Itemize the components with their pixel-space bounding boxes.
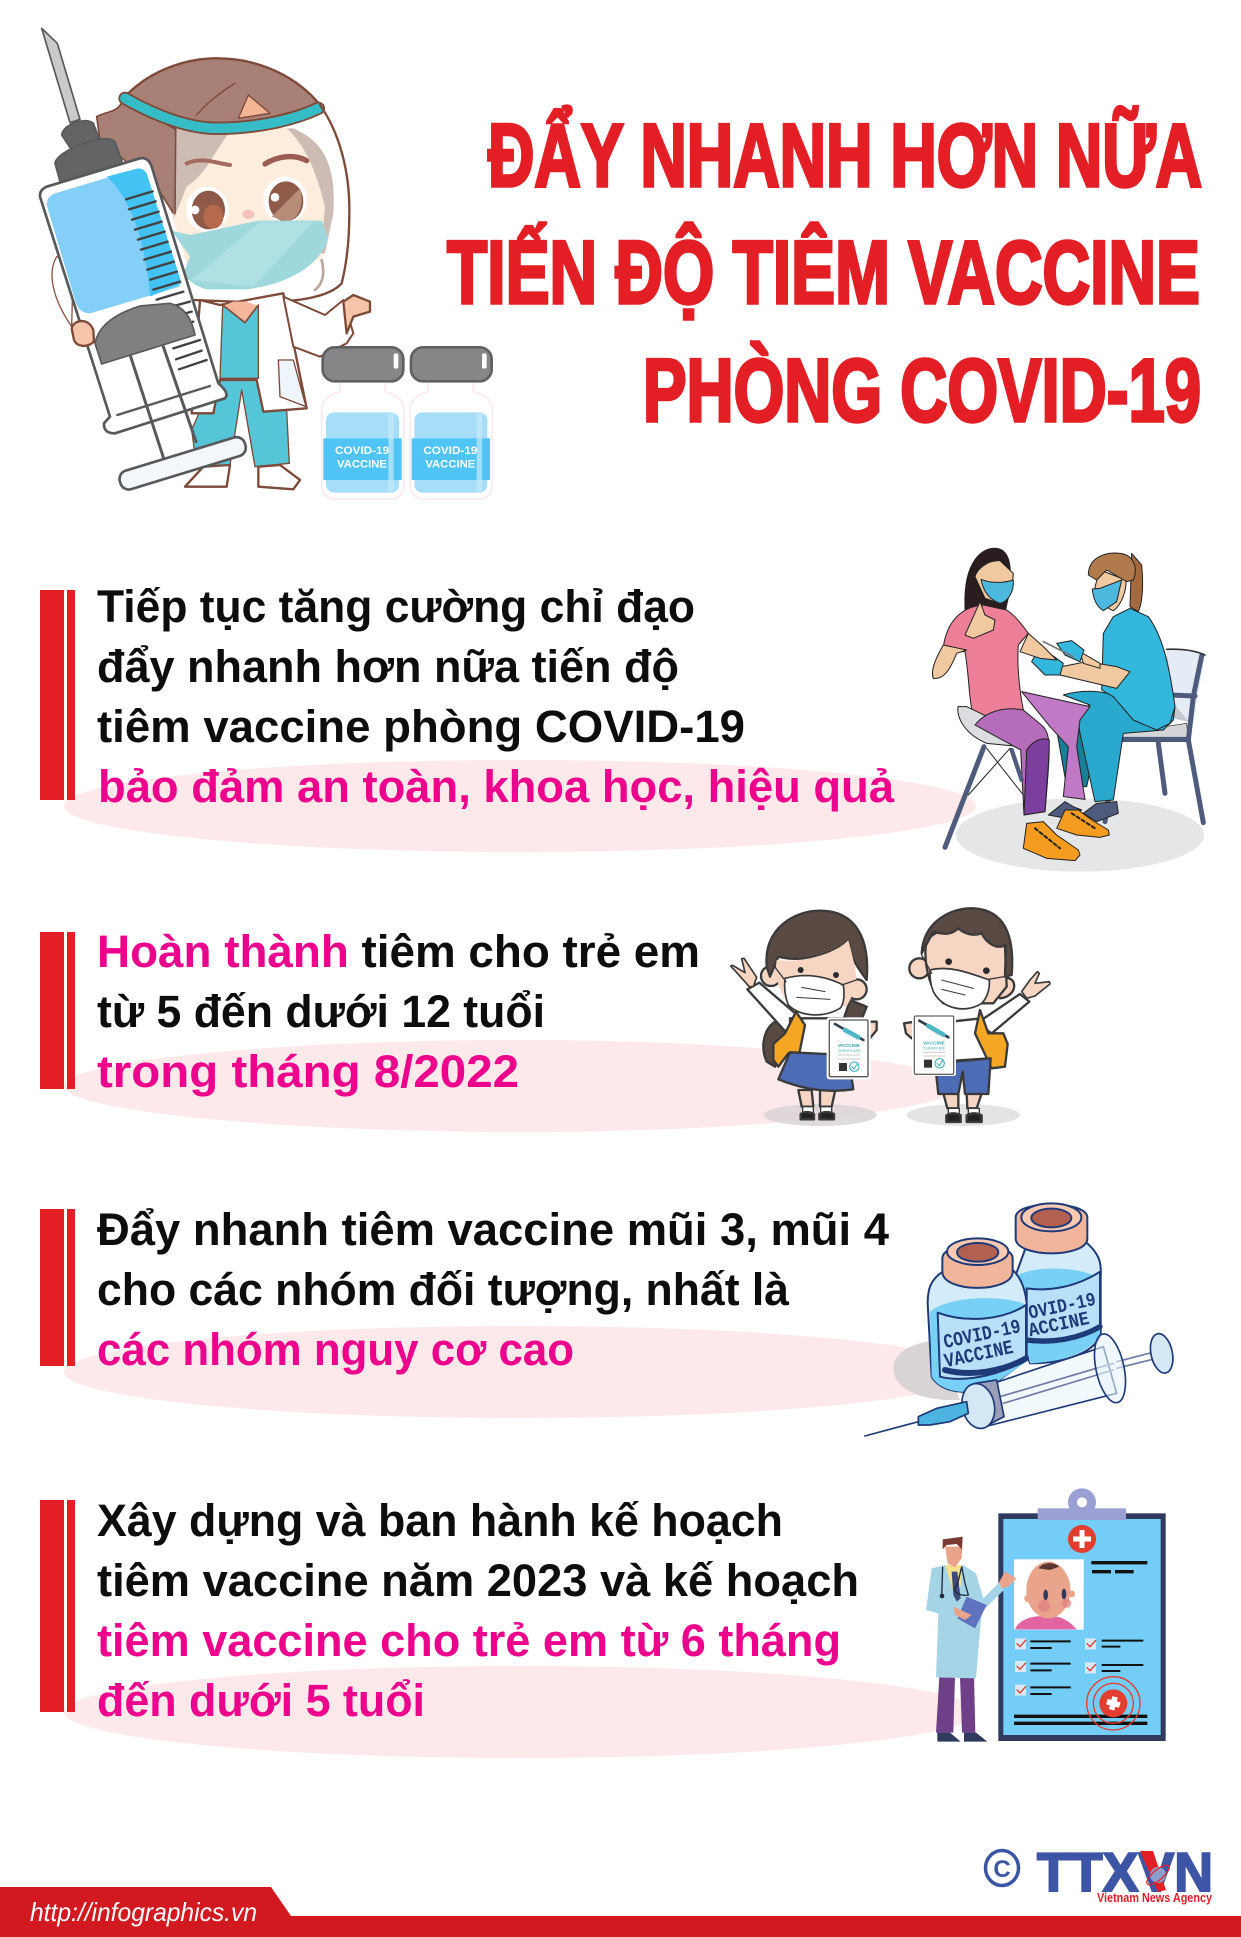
floor shadow	[956, 798, 1204, 872]
baby photo	[1014, 1559, 1084, 1630]
red V accent and globe	[1140, 1851, 1172, 1892]
highlight ellipse 3	[64, 1326, 976, 1418]
pants and shoes	[192, 380, 289, 467]
marker bars 1	[40, 590, 75, 800]
text block 1	[97, 581, 895, 812]
panel: item 4	[40, 1495, 976, 1758]
text block 4: tiêm vaccine năm 2023 và kế hoạch	[97, 1555, 859, 1606]
syringe	[865, 1331, 1176, 1436]
panel: item 1	[40, 581, 976, 852]
text block 3: các nhóm nguy cơ cao	[97, 1324, 574, 1375]
text block 4	[97, 1495, 859, 1726]
boy	[904, 908, 1050, 1126]
boy's certificate: CERTIFICATE	[923, 1046, 946, 1050]
front vial: VACCINE	[942, 1337, 1016, 1374]
girl	[731, 911, 877, 1126]
vaccine vial right: VACCINE	[425, 459, 476, 471]
text block 2: Hoàn thành tiêm cho trẻ em	[97, 926, 700, 977]
patient	[932, 548, 1109, 861]
giant syringe	[40, 28, 248, 492]
vaccine vial right	[410, 347, 492, 499]
illustration: patient receiving vaccine	[932, 548, 1205, 872]
front vial: COVID-19	[942, 1316, 1023, 1355]
shadow	[893, 1340, 960, 1400]
text block 3	[97, 1204, 889, 1375]
title	[447, 105, 1202, 440]
text block 3: cho các nhóm đối tượng, nhất là	[97, 1264, 790, 1315]
illustration: vaccine vials and syringe	[865, 1203, 1176, 1436]
text block 3: Đẩy nhanh tiêm vaccine mũi 3, mũi 4	[97, 1204, 889, 1255]
panel: item 3	[40, 1204, 976, 1418]
text block 4: đến dưới 5 tuổi	[97, 1675, 425, 1726]
clipboard	[998, 1488, 1166, 1741]
girl's certificate: VACCINE	[838, 1043, 861, 1049]
girl's certificate	[827, 1017, 871, 1079]
boy's certificate: VACCINE	[923, 1041, 946, 1047]
back vial: ACCINE	[1027, 1308, 1091, 1342]
text block 2	[97, 926, 700, 1097]
agency name: Vietnam News Agency	[1097, 1890, 1213, 1905]
copyright mark	[986, 1850, 1018, 1886]
TTXVN logo	[986, 1841, 1213, 1905]
text block 4: Xây dựng và ban hành kế hoạch	[97, 1495, 783, 1546]
vaccine vial left: COVID-19	[335, 445, 389, 457]
doctor	[926, 1537, 1017, 1742]
text block 4: tiêm vaccine cho trẻ em từ 6 tháng	[97, 1615, 841, 1666]
highlight ellipse 1	[64, 760, 976, 852]
text block 2: trong tháng 8/2022	[97, 1046, 519, 1097]
highlight ellipse 4	[64, 1666, 976, 1758]
marker bars 2	[40, 932, 75, 1089]
vaccine vial right: COVID-19	[423, 445, 477, 457]
checklist	[1014, 1638, 1147, 1723]
girl's certificate: CERTIFICATE	[838, 1049, 861, 1053]
nurse's chair	[1105, 649, 1205, 823]
nurse	[1032, 553, 1175, 822]
vaccine vial left	[322, 347, 404, 499]
face shield outline	[193, 105, 349, 303]
copyright mark: C	[993, 1856, 1011, 1883]
TTXVN wordmark: TTXVN	[1037, 1841, 1213, 1903]
illustration: two children with vaccine certificates	[731, 908, 1050, 1126]
illustration: nurse with syringe and vials	[40, 28, 492, 499]
front vial	[928, 1238, 1027, 1392]
text block 1: bảo đảm an toàn, khoa học, hiệu quả	[98, 761, 895, 812]
back vial	[1007, 1203, 1101, 1363]
boy's certificate	[912, 1014, 956, 1076]
illustration: doctor with medical record clipboard	[926, 1488, 1166, 1742]
text block 1: Tiếp tục tăng cường chỉ đạo	[97, 581, 695, 632]
nurse character	[52, 58, 370, 489]
footer band with URL tab	[0, 1887, 1241, 1937]
text block 2: từ 5 đến dưới 12 tuổi	[97, 986, 545, 1037]
marker bars 4	[40, 1500, 75, 1712]
marker bars 3	[40, 1209, 75, 1366]
stamp	[1087, 1677, 1140, 1730]
face mask	[172, 221, 328, 289]
footer URL: http://infographics.vn	[30, 1897, 257, 1927]
hand holding syringe	[72, 321, 94, 346]
text block 1: đẩy nhanh hơn nữa tiến độ	[97, 641, 679, 692]
text block 1: tiêm vaccine phòng COVID-19	[97, 701, 745, 752]
vaccine vial left: VACCINE	[337, 459, 387, 471]
eyes	[186, 177, 307, 232]
coat and scrubs	[192, 293, 307, 413]
patient's stool legs	[945, 747, 1023, 847]
highlight ellipse 2	[64, 1040, 960, 1132]
panel: item 2	[40, 926, 960, 1132]
back vial: OVID-19	[1027, 1289, 1098, 1325]
